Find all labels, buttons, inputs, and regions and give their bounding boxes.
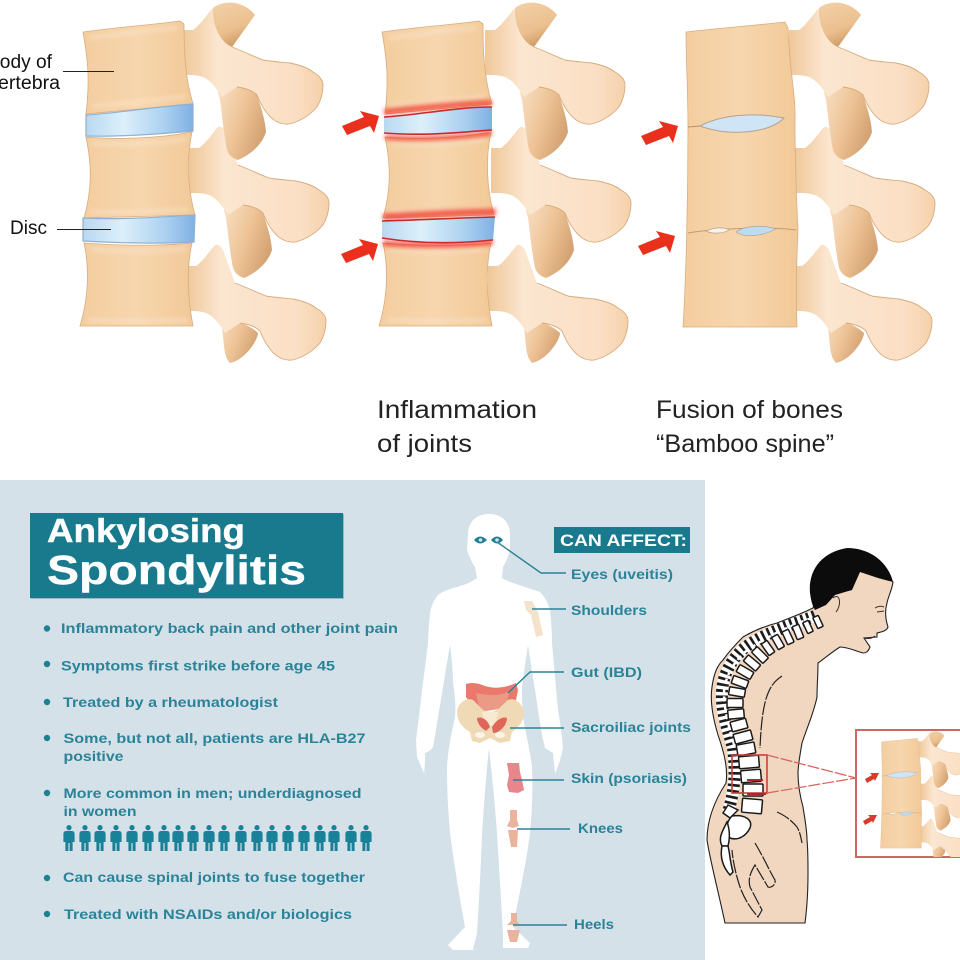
- caption: fusion: Fusion of bones: [656, 396, 843, 424]
- zoom rectangle: [732, 755, 767, 794]
- bullet list: positive: [64, 748, 124, 764]
- panel: inflamed vertebrae: [341, 3, 631, 458]
- sacrum and coccyx: [720, 805, 751, 875]
- panel: infographic background: [0, 480, 705, 960]
- icon: heel: [507, 913, 520, 942]
- leader lines: [497, 542, 570, 925]
- caption: fusion: [656, 396, 843, 458]
- icon: pelvis and gut: [457, 683, 524, 743]
- icon: skin patch: [507, 763, 524, 793]
- bullet list: Some, but not all, patients are HLA-B27: [64, 730, 366, 746]
- bullet list: Symptoms first strike before age 45: [61, 658, 335, 674]
- disc: lower healthy: [83, 215, 195, 243]
- labels: affected areas: Skin (psoriasis): [571, 770, 687, 786]
- bullet list: in women: [64, 803, 136, 819]
- labels: affected areas: Sacroiliac joints: [571, 719, 691, 735]
- labels: affected areas: Shoulders: [571, 602, 647, 618]
- inflammation glow: [383, 103, 496, 245]
- rear processes: [722, 616, 815, 812]
- caption: fusion: “Bamboo spine”: [656, 430, 834, 458]
- bullet list: Treated with NSAIDs and/or biologics: [64, 906, 352, 922]
- panel: healthy vertebrae: [0, 3, 329, 363]
- label: disc: [10, 218, 111, 239]
- man arm lines: [732, 676, 802, 917]
- labels: affected areas: Heels: [574, 916, 614, 932]
- label: body of vertebra: [0, 52, 114, 94]
- figure: stooped man with spine: [707, 548, 893, 923]
- arrow: lower fusion: [638, 231, 675, 255]
- disc: upper inflamed: [384, 107, 492, 134]
- title box: [30, 512, 344, 599]
- man hair: [810, 548, 893, 610]
- caption: inflammation: of joints: [377, 430, 472, 458]
- caption: inflammation: Inflammation: [377, 396, 537, 424]
- labels: affected areas: Knees: [578, 820, 623, 836]
- icon: shoulder bone: [524, 601, 543, 637]
- labels: affected areas: Eyes (uveitis): [571, 566, 673, 582]
- spine: [720, 615, 823, 875]
- bullet list: Can cause spinal joints to fuse together: [63, 869, 366, 885]
- heading: can affect: [554, 527, 690, 553]
- arrow: upper inflammation: [342, 111, 379, 135]
- arrow: upper fusion: [641, 121, 678, 145]
- pictogram: row of people: [63, 825, 372, 851]
- bullet list: [44, 620, 398, 922]
- inset arrow: upper: [865, 773, 879, 783]
- title box: Spondylitis: [47, 547, 306, 593]
- icon: knee: [507, 810, 519, 847]
- title box: Ankylosing: [47, 512, 245, 549]
- labels: affected areas: Gut (IBD): [571, 664, 642, 680]
- bullet list: Inflammatory back pain and other joint pain: [61, 620, 398, 636]
- inset: fused spine close up: [856, 730, 960, 861]
- bullet list: Treated by a rheumatologist: [63, 694, 278, 710]
- zoom dashed lines: [767, 755, 856, 793]
- arrow: lower inflammation: [341, 239, 378, 263]
- man ear and face lines: [833, 596, 884, 639]
- label: disc: Disc: [10, 218, 47, 239]
- disc: lower inflamed: [382, 217, 495, 243]
- labels: affected areas: [571, 566, 691, 932]
- heading: can affect: CAN AFFECT:: [560, 531, 687, 550]
- disc: upper healthy: [86, 104, 193, 136]
- caption: inflammation: [377, 396, 537, 458]
- vertebral bodies: [727, 615, 823, 814]
- icon: eyes: [474, 536, 503, 544]
- body silhouette: [416, 514, 563, 950]
- inset arrow: lower: [863, 815, 877, 825]
- bullet list: More common in men; underdiagnosed: [64, 785, 362, 801]
- panel: fused vertebrae: [638, 3, 935, 458]
- man body and head: [707, 564, 893, 923]
